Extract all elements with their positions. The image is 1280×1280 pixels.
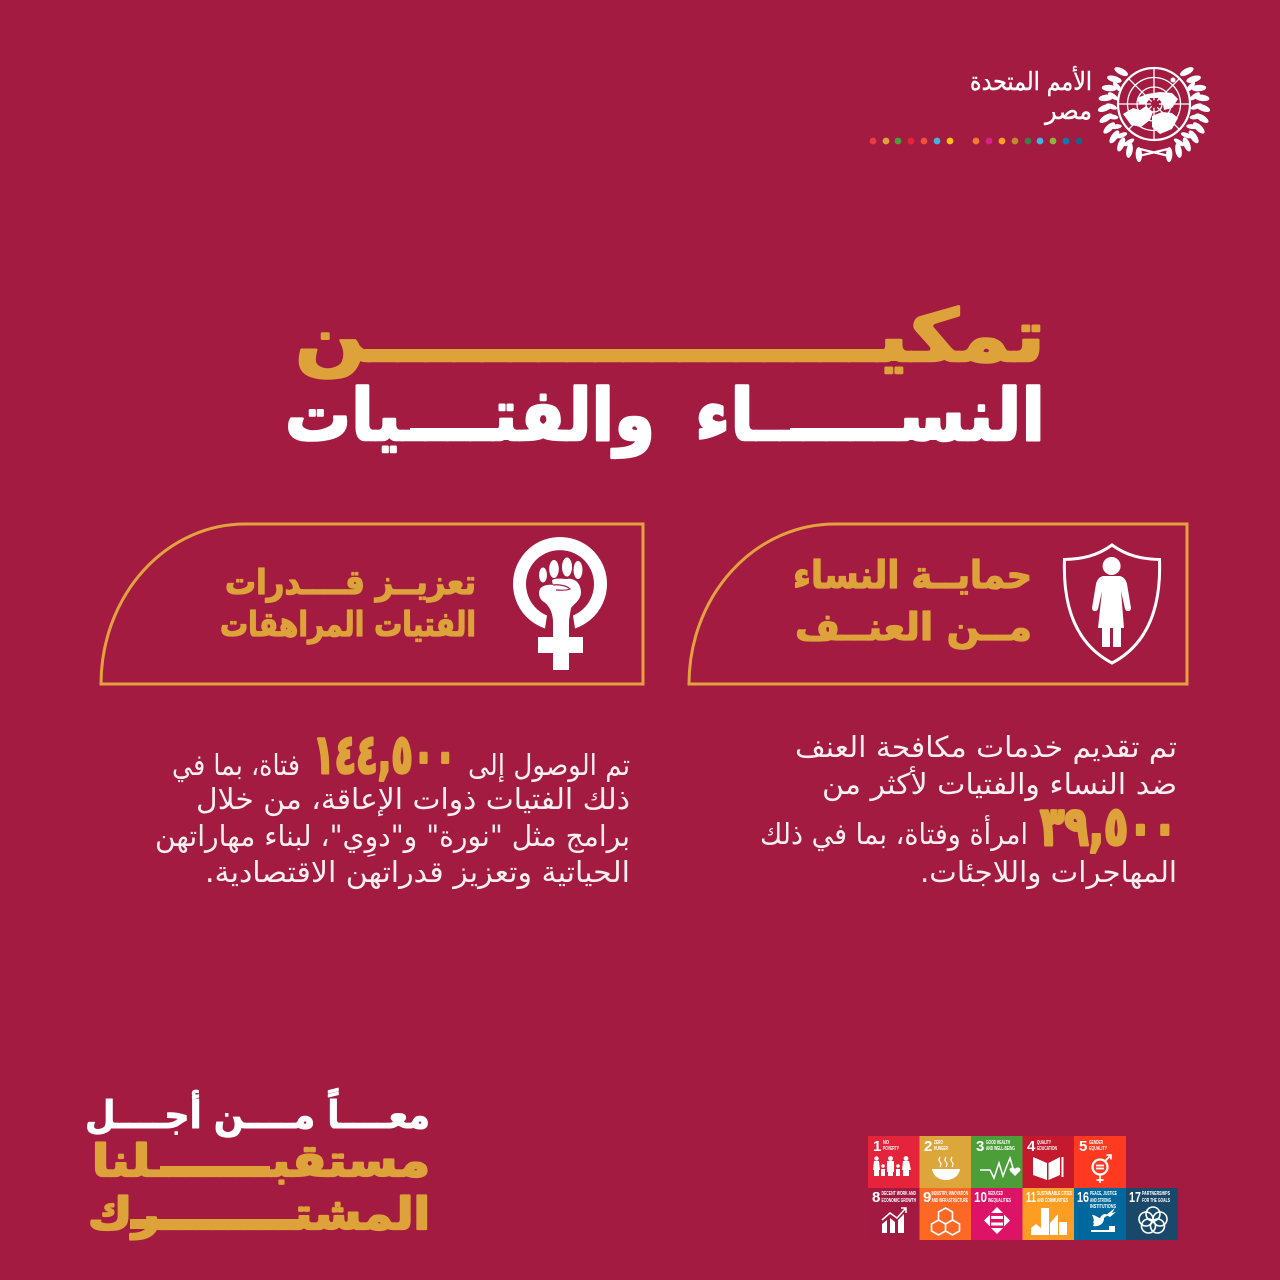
tile 9: AND INFRASTRUCTURE: [932, 1198, 968, 1204]
text block: violence services: [760, 730, 1177, 889]
tile 2: HUNGER: [934, 1146, 948, 1152]
icon: raised fist in female symbol: [513, 537, 607, 670]
tile 9: [920, 1188, 971, 1240]
tile 2: ZERO: [934, 1140, 943, 1146]
tile 8: [868, 1188, 920, 1240]
text block: girls reached: ذلك الفتيات ذوات الإعاقة، من خلال: [196, 782, 630, 817]
slogan: مستقبـــــــلنا: [92, 1136, 430, 1187]
icon: UN emblem: [1097, 65, 1211, 162]
heading: [793, 553, 1032, 649]
tile 1: NO: [883, 1140, 890, 1146]
tile 10: [971, 1188, 1022, 1240]
tile 3: [971, 1136, 1022, 1188]
tile 4: [1022, 1136, 1074, 1188]
text block: violence services: تم تقديم خدمات مكافحة العنف: [795, 730, 1177, 765]
heading: مــن العنــف: [795, 605, 1032, 649]
number: 39,500: ٣٩,٥٠٠: [1040, 795, 1177, 858]
panel: protecting women from violence: [689, 524, 1187, 684]
heading: [220, 563, 476, 645]
tile 11: AND COMMUNITIES: [1037, 1198, 1068, 1204]
tile 16: PEACE, JUSTICE: [1090, 1191, 1117, 1197]
number: 144,500: ١٤٤,٥٠٠: [313, 723, 456, 786]
title: [285, 294, 1045, 458]
tile 16: [1074, 1188, 1126, 1240]
tile 3: AND WELL-BEING: [986, 1146, 1015, 1152]
tile 5: EQUALITY: [1089, 1146, 1107, 1152]
tile 17: 17: [1129, 1189, 1141, 1206]
tile 8: ECONOMIC GROWTH: [882, 1198, 916, 1204]
panel: building adolescent girls' capacities: [101, 524, 643, 684]
tile 10: REDUCED: [988, 1191, 1003, 1197]
tile 1: [868, 1136, 920, 1188]
tile 9: INDUSTRY, INNOVATION: [932, 1191, 968, 1197]
text block: girls reached: فتاة، بما في: [172, 748, 300, 783]
tile 1: 1: [873, 1138, 881, 1155]
organisation name: مصر: [1043, 96, 1092, 125]
title line 2: النســــــاء: [695, 373, 1045, 457]
slogan: [85, 1088, 430, 1240]
text block: violence services: امرأة وفتاة، بما في ذلك: [760, 814, 1028, 852]
slogan: المشتــــــــرك: [88, 1189, 430, 1240]
text block: girls reached: برامج مثل "نورة" و"دوِي"، لبناء مهاراتهن: [155, 819, 630, 857]
tile 17: FOR THE GOALS: [1142, 1198, 1170, 1204]
text block: violence services: ضد النساء والفتيات لأكثر من: [822, 765, 1177, 801]
heading: الفتيات المراهقات: [220, 605, 476, 645]
tile 5: [1074, 1136, 1126, 1188]
title line 2: والفتــــيات: [285, 373, 655, 458]
tile 8: 8: [872, 1189, 880, 1206]
tile 8: DECENT WORK AND: [882, 1191, 916, 1197]
tile 11: 11: [1026, 1189, 1036, 1206]
text block: girls reached: تم الوصول إلى: [468, 748, 630, 783]
text block: violence services: المهاجرات واللاجئات.: [920, 855, 1177, 889]
SDG goal tiles: [868, 1136, 1178, 1240]
tile 4: EDUCATION: [1037, 1146, 1057, 1152]
tile 10: INEQUALITIES: [988, 1198, 1011, 1204]
tile 3: 3: [976, 1138, 984, 1155]
title line 1: تمكيــــــــــــــــــن: [295, 294, 1045, 379]
heading: حمايــة النساء: [793, 553, 1032, 597]
organisation name: [970, 65, 1092, 125]
organisation name: الأمم المتحدة: [970, 65, 1092, 97]
tile 9: 9: [923, 1189, 931, 1206]
panel frame: [101, 524, 643, 684]
text block: girls reached: [155, 723, 630, 889]
tile 11: [1022, 1188, 1074, 1240]
logo: UN Egypt: [870, 65, 1211, 162]
tile 3: GOOD HEALTH: [986, 1140, 1010, 1146]
tile 4: QUALITY: [1037, 1140, 1051, 1146]
panel frame: [689, 524, 1187, 684]
tile 2: [920, 1136, 971, 1188]
tile 17: [1126, 1188, 1178, 1240]
tile 16: 16: [1077, 1189, 1089, 1206]
tile 16: INSTITUTIONS: [1090, 1204, 1116, 1210]
heading: تعزيــز قــــدرات: [225, 563, 476, 603]
tile 16: AND STRONG: [1090, 1198, 1111, 1204]
tile 17: PARTNERSHIPS: [1142, 1191, 1170, 1197]
tile 10: 10: [974, 1189, 987, 1206]
tile 5: 5: [1079, 1138, 1087, 1155]
tile 4: 4: [1027, 1138, 1036, 1155]
tile 11: SUSTAINABLE CITIES: [1037, 1191, 1072, 1197]
title line 2: [285, 373, 1045, 458]
text block: girls reached: الحياتية وتعزيز قدراتهن الاقتصادية.: [205, 855, 630, 889]
icon: woman in shield: [1064, 545, 1160, 663]
coloured dots row: [870, 138, 1082, 144]
tile 2: 2: [924, 1138, 932, 1155]
tile 1: POVERTY: [883, 1146, 899, 1152]
slogan: معــــاً مــــن أجــــل: [85, 1088, 430, 1137]
tile 5: GENDER: [1089, 1140, 1103, 1146]
